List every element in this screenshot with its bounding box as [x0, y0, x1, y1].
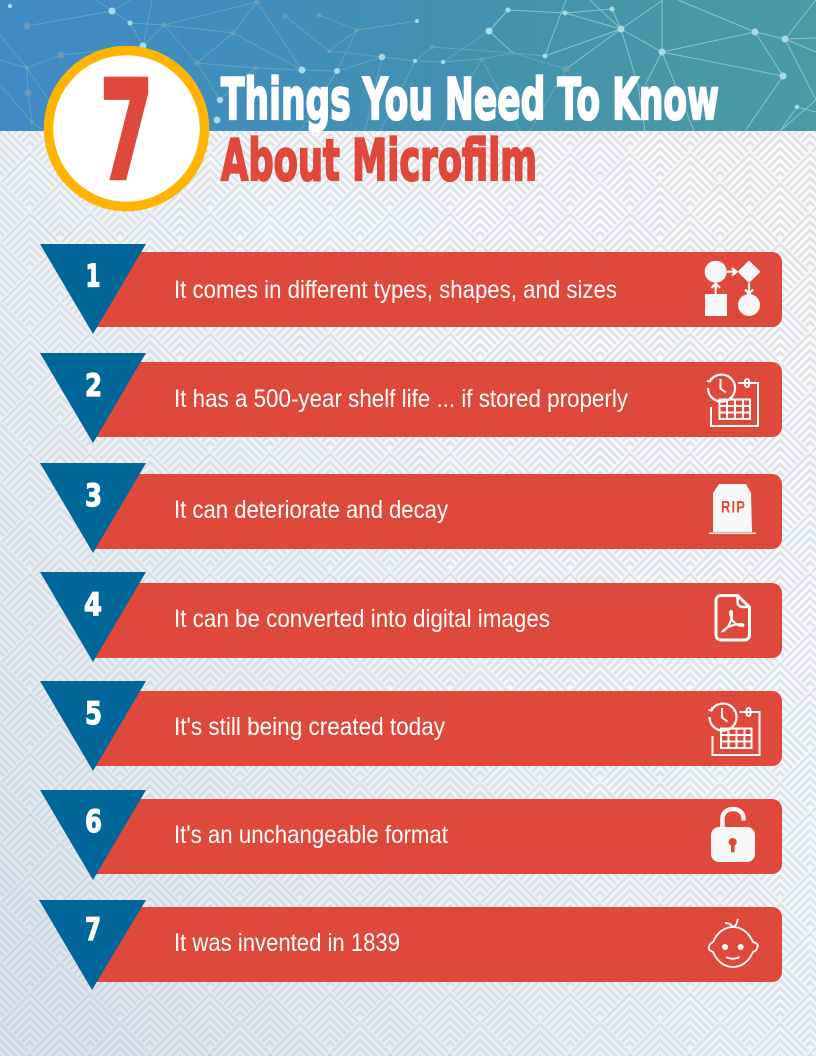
item 4 [40, 572, 782, 662]
item 5: It's still being created today [174, 713, 445, 741]
item 3: 3 [85, 478, 102, 514]
badge: yellow ring with big 7: 7 [100, 53, 153, 211]
item 5: 5 [85, 696, 102, 732]
item 7: 7 [85, 912, 101, 948]
item 6 [40, 790, 782, 880]
item 2: 2 [85, 368, 102, 404]
title: About Microfilm [221, 128, 537, 194]
item 4: It can be converted into digital images [174, 605, 550, 633]
icon: RIP tombstone [709, 484, 756, 534]
item 1: It comes in different types, shapes, and sizes [174, 276, 617, 304]
icon: RIP tombstone: RIP [721, 498, 746, 516]
icon: flowchart [705, 260, 760, 316]
item 1 [40, 244, 782, 334]
icon: clock and calendar [708, 704, 760, 755]
item 5 [40, 681, 782, 771]
header band with network graphic [0, 0, 816, 131]
item 3 [40, 463, 782, 553]
badge: yellow ring with big 7 [48, 50, 204, 211]
item 2 [40, 353, 782, 443]
item 6: It's an unchangeable format [174, 821, 448, 849]
icon: open padlock [711, 809, 755, 862]
item 6: 6 [85, 804, 102, 840]
icon: PDF document [716, 596, 750, 640]
item 1: 1 [86, 258, 100, 294]
title [221, 67, 719, 194]
item 3: It can deteriorate and decay [174, 496, 448, 524]
icon: clock and calendar [707, 375, 758, 426]
item 4: 4 [84, 587, 102, 623]
item 7: It was invented in 1839 [174, 929, 400, 957]
item 7 [39, 900, 782, 990]
icon: baby face [709, 919, 758, 967]
item 2: It has a 500-year shelf life ... if stored properly [174, 385, 628, 413]
